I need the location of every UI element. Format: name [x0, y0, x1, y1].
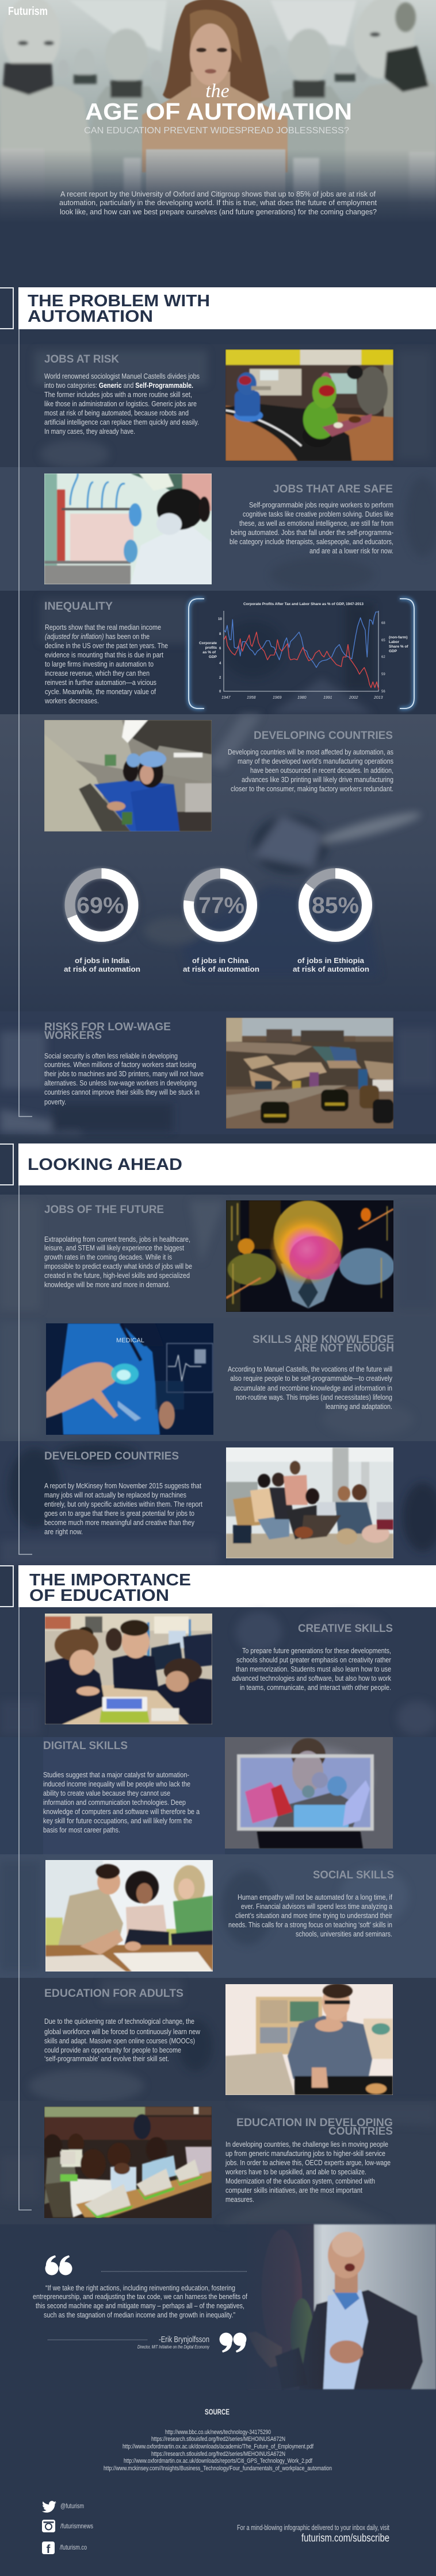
attribution: -Erik Brynjolfsson — [159, 2335, 209, 2344]
sources: https://research.stlouisfed.org/fred2/series/MEHOINUSA672N — [151, 2451, 285, 2458]
logo: Futurism: Futurism — [8, 5, 48, 18]
text block: goes on to argue that there is great potential for jobs to — [44, 1509, 194, 1518]
text block: ability to create value because they cannot use — [43, 1789, 170, 1797]
text block: jobs. In order to achieve this, OECD experts argue, low-wage — [225, 2158, 391, 2167]
right large robot — [345, 78, 436, 230]
panel: inequality — [0, 591, 436, 714]
text block — [44, 1052, 204, 1106]
panel: jobs that are safe — [0, 467, 436, 592]
left axis label: profits — [205, 646, 217, 650]
text block: cognitive tasks like creative problem solving. Duties like — [243, 510, 393, 518]
right axis label: Share % of — [389, 645, 408, 649]
text block: Developing countries will be most affected by automation, as — [228, 748, 393, 756]
text block: advanced technologies and software, but also how to work — [232, 1674, 391, 1682]
text block: evidence is mounting that this is due in part — [45, 650, 163, 659]
donut: India 69%: 69% — [77, 893, 124, 918]
left axis label: as % of — [202, 650, 216, 654]
text block: computer skills initiatives, are the most important — [225, 2186, 362, 2194]
text block: most at risk of being automated, because robots and — [44, 409, 189, 417]
quote text: such as the stagnation of median income and the growth in inequality.” — [44, 2311, 235, 2319]
panel: jobs at risk — [0, 344, 436, 468]
heading: JOBS AT RISK — [44, 353, 119, 365]
right axis ticks: 65 — [381, 639, 385, 642]
subtitle: CAN EDUCATION PREVENT WIDESPREAD JOBLESSNESS? — [84, 126, 349, 136]
sources: SOURCE — [205, 2407, 230, 2416]
photo: schoolchildren with green laptops — [44, 2107, 212, 2218]
attribution — [137, 2335, 210, 2350]
text block: reinvest in further automation—a vicious — [45, 678, 156, 687]
panel: jobs of the future — [0, 1195, 436, 1318]
woman — [163, 0, 269, 103]
text block: leisure, and STEM will likely experience the biggest — [44, 1243, 184, 1252]
heading: ARE NOT ENOUGH — [294, 1342, 394, 1354]
photo: robot waiters in restaurant — [225, 349, 393, 461]
photo: Erik Brynjolfsson speaking — [230, 2224, 436, 2389]
text block: many jobs will not actually be replaced by machines — [44, 1491, 186, 1499]
heading: SKILLS AND KNOWLEDGE — [253, 1333, 394, 1346]
subscribe call to action: futurism.com/subscribe — [301, 2532, 389, 2544]
text block: impossible to predict exactly what kinds of jobs will be — [44, 1262, 192, 1270]
right axis ticks: 59 — [381, 673, 385, 676]
panel: skills and knowledge are not enough — [0, 1318, 436, 1441]
intro paragraph: look like, and how can we best prepare ourselves (and future generations) for the coming changes? — [60, 207, 377, 216]
text block: than memorization. Students must also learn how to use — [236, 1665, 391, 1673]
donut: India 69% — [64, 873, 140, 973]
panel: creative skills — [0, 1607, 436, 1737]
line chart: corporate profits vs labor share — [189, 599, 414, 709]
section heading band: the importance of education: OF EDUCATION — [29, 1587, 169, 1605]
text block: (adjusted for inflation) has been on the — [45, 632, 150, 641]
vertical timeline line: section two — [19, 1185, 32, 1554]
heading: JOBS OF THE FUTURE — [44, 1203, 164, 1216]
chart bracket frame — [189, 599, 414, 709]
panel: developed countries — [0, 1441, 436, 1565]
text block: accumulate and recombine knowledge and information in — [234, 1384, 392, 1392]
text block: Social security is often less reliable in developing — [44, 1052, 178, 1060]
quote block — [33, 2255, 247, 2352]
left axis ticks: 10 — [218, 618, 222, 621]
intro paragraph: A recent report by the University of Oxford and Citigroup shows that up to 85% of jobs are at risk of — [60, 190, 376, 198]
x axis labels: 1991 — [323, 696, 332, 700]
text block — [228, 1893, 393, 1938]
icon: instagram — [42, 2520, 55, 2532]
heading — [236, 2116, 393, 2138]
text block: decline in the US over the past ten years. The — [45, 641, 168, 650]
right axis ticks: 62 — [381, 656, 385, 659]
text block: knowledge will be more and more in demand. — [44, 1280, 170, 1289]
title block — [84, 80, 352, 136]
dotted rule top — [101, 2271, 247, 2272]
heading — [253, 1333, 394, 1354]
text block: increase revenue, which they can then — [45, 669, 150, 677]
right axis ticks — [381, 622, 385, 694]
axes — [224, 611, 378, 691]
text block: Reports show that the real median income — [45, 623, 161, 632]
section heading band: the importance of education — [0, 1565, 436, 1607]
heading — [44, 1021, 171, 1042]
attribution: Director, MIT Initiative on the Digital Economy — [137, 2344, 210, 2350]
donut: China 77%: at risk of automation — [183, 965, 259, 973]
donut: China 77%: 77% — [198, 893, 244, 918]
text block: up from generic manufacturing jobs to higher-skill service — [225, 2149, 385, 2158]
text block: learning and adaptation. — [326, 1402, 392, 1411]
text block: like those in administration or logistics. Generic jobs are — [44, 399, 197, 408]
instagram handle: /futurismnews — [60, 2522, 93, 2530]
text block: poverty. — [44, 1098, 66, 1106]
photo: slum with rickshaws — [226, 1018, 393, 1129]
x axis labels: 1958 — [247, 696, 256, 700]
panel: social skills — [0, 1854, 436, 1978]
donut: Ethiopia 85% — [293, 873, 369, 973]
text block: being automated. Jobs that fall under the self-programma- — [231, 528, 393, 537]
text block: basis for most career paths. — [43, 1826, 120, 1834]
sources: http://www.oxfordmartin.ox.ac.uk/downloads/academic/The_Future_of_Employment.pdf — [123, 2443, 314, 2450]
heading: SOCIAL SKILLS — [313, 1869, 394, 1881]
panel: digital skills — [0, 1737, 436, 1854]
text block: The former includes jobs with a more routine skill set, — [44, 390, 192, 399]
text block — [44, 1481, 202, 1536]
text block: schools, universities and seminars. — [296, 1930, 392, 1938]
right axis ticks: 56 — [381, 690, 385, 694]
text block — [228, 1365, 392, 1411]
social links — [42, 2501, 93, 2556]
heading: JOBS THAT ARE SAFE — [273, 483, 393, 495]
plotted lines — [224, 612, 378, 690]
text block: alternatives. So unless low-wage workers in developing — [44, 1079, 197, 1087]
donut: India 69%: at risk of automation — [64, 965, 140, 973]
left axis ticks: 4 — [219, 662, 221, 665]
heading: CREATIVE SKILLS — [298, 1622, 393, 1635]
chart title: Corporate Profits After Tax and Labor Share as % of GDP, 1947-2013 — [243, 602, 364, 606]
subscribe call to action — [237, 2524, 389, 2544]
x axis labels — [221, 696, 383, 700]
heading: EDUCATION FOR ADULTS — [44, 1987, 183, 2000]
section heading band: looking ahead: LOOKING AHEAD — [28, 1156, 182, 1174]
heading: RISKS FOR LOW-WAGE — [44, 1021, 171, 1033]
text block — [43, 1770, 200, 1834]
panel: education in developing countries — [0, 2101, 436, 2224]
vertical timeline line: section three — [19, 1607, 32, 2210]
text block: Self-programmable jobs require workers to perform — [249, 500, 393, 509]
text block — [44, 2017, 201, 2063]
photo: man at laptop — [225, 1984, 393, 2095]
panel: risks for low-wage workers — [0, 1011, 436, 1134]
background faded worker — [81, 714, 423, 977]
text block: to large firms investing in automation to — [45, 660, 154, 668]
text block: needs. This calls for a strong focus on teaching ‘soft’ skills in — [228, 1920, 392, 1929]
photo: medical touch interface — [46, 1323, 213, 1435]
text block: workers have to be upskilled, and able to specialize. — [225, 2167, 366, 2176]
text block: created in the future, high-level skills and specialized — [44, 1271, 190, 1280]
text block: and are at a lower risk for now. — [309, 546, 393, 555]
photo: three colleagues at table — [45, 1860, 213, 1972]
text block: ever. Financial advisors will spend less time analyzing a — [241, 1902, 393, 1911]
panel: developing countries with background worker — [0, 714, 436, 1011]
dotted rule bottom — [48, 2339, 147, 2340]
text block: knowledge of computers and software will therefore be a — [43, 1807, 200, 1816]
photo: lab worker — [44, 473, 212, 584]
text block: closer to the consumer, making factory workers redundant. — [231, 784, 393, 793]
text block: skills and adapt. Massive open online courses (MOOCs) — [44, 2036, 195, 2045]
left axis label: GDP — [209, 655, 217, 659]
heading: DEVELOPING COUNTRIES — [254, 729, 393, 742]
right axis ticks: 68 — [381, 622, 385, 625]
sources — [104, 2407, 332, 2472]
text block: A report by McKinsey from November 2015 suggests that — [44, 1481, 201, 1490]
text block: into two categories: Generic and Self-Programmable. — [44, 381, 193, 390]
text block: To prepare future generations for these developments, — [242, 1646, 391, 1655]
donut: China 77% — [183, 873, 259, 973]
panel: education for adults — [0, 1978, 436, 2103]
photo: woman with holographic screen — [225, 1737, 393, 1849]
text block: World renowned sociologist Manuel Castells divides jobs — [44, 372, 200, 380]
heading: DEVELOPED COUNTRIES — [44, 1450, 179, 1462]
text block: their jobs to machines and 3D printers, many will not have — [44, 1069, 204, 1078]
text block: Human empathy will not be automated for a long time, if — [238, 1893, 392, 1901]
text block: could provide an opportunity for people to become — [44, 2046, 181, 2054]
quote text — [33, 2284, 247, 2319]
left axis ticks: 6 — [219, 647, 221, 650]
icon: twitter — [42, 2501, 56, 2513]
text block: are right now. — [44, 1527, 83, 1536]
sources: http://www.bbc.co.uk/news/technology-34175290 — [165, 2429, 271, 2436]
text block — [44, 372, 200, 436]
text block: information and communication technologies. Deep — [43, 1798, 186, 1807]
text block: artificial intelligence can replace them quickly and easily. — [44, 418, 199, 426]
heading: WORKERS — [44, 1029, 102, 1042]
left axis ticks: 0 — [219, 690, 221, 694]
text block: growth rates in the coming decades. While it is — [44, 1253, 172, 1261]
text block: In many cases, they already have. — [44, 427, 135, 436]
x axis labels: 2002 — [349, 696, 358, 700]
text block — [225, 2140, 391, 2204]
vertical timeline line: section one — [19, 329, 32, 1116]
title: the: the — [205, 80, 230, 102]
section heading band: looking ahead — [0, 1143, 436, 1185]
heading: COUNTRIES — [328, 2125, 393, 2138]
text block: countries. When millions of factory workers start losing — [44, 1060, 196, 1069]
quote text: this second machine age and mitigate many – perhaps all – of the negatives, — [36, 2301, 244, 2310]
left axis ticks: 8 — [219, 633, 221, 636]
text block: induced income inequality will be people who lack the — [43, 1780, 190, 1788]
icon: opening quote mark — [45, 2255, 72, 2275]
icon: facebook: f — [47, 2543, 51, 2556]
text block: become much more meaningful and creative than they — [44, 1518, 194, 1527]
section heading band: the problem with automation — [0, 287, 436, 329]
text block: ‘self-programmable’ and evolve their skill set. — [44, 2054, 169, 2063]
desks — [124, 158, 141, 210]
text block: measures. — [225, 2195, 254, 2204]
text block: in teams, communicate, and interact with other people. — [240, 1683, 391, 1692]
donut: India 69%: of jobs in India — [75, 956, 130, 965]
text block: advances like 3D printing will likely drive manufacturing — [242, 775, 393, 784]
donut: China 77%: of jobs in China — [192, 956, 249, 965]
text block: also require people to be self-programmable—to creatively — [230, 1374, 392, 1383]
x axis labels: 1980 — [297, 696, 307, 700]
x axis labels: 1947 — [221, 696, 231, 700]
left large robot — [0, 86, 95, 230]
text block: entirely, but only specific activities within them. The report — [44, 1500, 202, 1508]
text block: key skill for future occupations, and will likely form the — [43, 1816, 192, 1825]
text block: Extrapolating from current trends, jobs in healthcare, — [44, 1235, 190, 1243]
right axis label: (non-farm) — [389, 636, 407, 640]
text block — [232, 1646, 392, 1692]
text block: ble category include therapists, salespeople, and educators, — [230, 537, 393, 546]
text block: Due to the quickening rate of technological change, the — [44, 2017, 194, 2026]
robots mid — [81, 86, 167, 172]
text block: have been outsourced in recent decades. In addition, — [250, 766, 393, 775]
x axis labels: 1969 — [273, 696, 282, 700]
text block — [44, 623, 168, 705]
quote text: entrepreneurship, and readjusting the tax code, we can harness the benefits of — [33, 2292, 247, 2301]
photo: factory workers — [44, 720, 212, 831]
heading: EDUCATION IN DEVELOPING — [236, 2116, 393, 2129]
sources: http://www.oxfordmartin.ox.ac.uk/downloads/reports/Citi_GPS_Technology_Work_2.pdf — [124, 2458, 313, 2465]
text block — [44, 1235, 192, 1289]
left axis ticks: 2 — [219, 676, 221, 680]
text block: schools should put greater emphasis on creativity rather — [236, 1655, 392, 1664]
right axis label: GDP — [389, 649, 397, 653]
sources: http://www.mckinsey.com//Insights/Business_Technology/Four_fundamentals_of_workplace_automation — [104, 2465, 332, 2472]
donut: Ethiopia 85%: 85% — [312, 893, 359, 918]
text block: countries cannot improve their skills they will be stuck in — [44, 1088, 200, 1096]
text block: these, as well as emotional intelligence, are still far from — [239, 519, 393, 527]
text block: Studies suggest that a major catalyst for automation- — [43, 1770, 189, 1779]
hero image: woman among robots — [0, 0, 436, 233]
text block: client’s situation and more time trying to understand their — [235, 1911, 393, 1920]
left axis label: Corporate — [199, 641, 217, 645]
photo: glowing AI head — [226, 1200, 393, 1312]
right axis label: Labor — [389, 640, 400, 644]
left axis ticks — [218, 618, 222, 694]
section heading band: the importance of education: THE IMPORTANCE — [29, 1571, 191, 1589]
icon: closing quote mark — [220, 2333, 246, 2352]
title: age of automation: AGE OF AUTOMATION — [85, 98, 352, 125]
intro paragraph: automation, particularly in the developing world. If this is true, what does the future of employment — [59, 198, 377, 207]
right axis label — [389, 636, 408, 653]
photo: medical touch interface: MEDICAL — [116, 1337, 144, 1344]
text block: Modernization of the education system, combined with — [225, 2177, 375, 2185]
text block: According to Manuel Castells, the vocations of the future will — [228, 1365, 392, 1373]
text block: cycle. Meanwhile, the monetary value of — [45, 687, 156, 696]
x axis labels: 2013 — [373, 696, 383, 700]
text block: workers decreases. — [44, 696, 99, 705]
text block: In developing countries, the challenge lies in moving people — [225, 2140, 388, 2148]
text block — [230, 500, 393, 555]
text block: many of the developed world’s manufacturing operations — [238, 757, 393, 765]
sources: https://research.stlouisfed.org/fred2/series/MEHOINUSA672N — [151, 2436, 285, 2443]
text block — [228, 748, 393, 793]
intro paragraph — [59, 190, 377, 216]
section heading band: the problem with automation: AUTOMATION — [28, 307, 153, 326]
photo: team in bright office — [226, 1447, 393, 1558]
text block: non-routine ways. This implies (and necessitates) lifelong — [236, 1393, 392, 1401]
donut: Ethiopia 85%: of jobs in Ethiopia — [297, 956, 365, 965]
facebook handle: /futurism.co — [60, 2543, 87, 2551]
heading: DIGITAL SKILLS — [43, 1739, 128, 1752]
left axis label — [199, 641, 217, 659]
photo: classroom tablet — [45, 1614, 212, 1724]
donut: Ethiopia 85%: at risk of automation — [293, 965, 369, 973]
heading: INEQUALITY — [44, 600, 113, 613]
quote text: “If we take the right actions, including reinventing education, fostering — [45, 2284, 235, 2292]
twitter handle: @futurism — [60, 2502, 84, 2510]
text block: global workforce will be forced to continuously learn new — [44, 2027, 201, 2036]
section heading band: the problem with automation: THE PROBLEM WITH — [28, 292, 210, 310]
